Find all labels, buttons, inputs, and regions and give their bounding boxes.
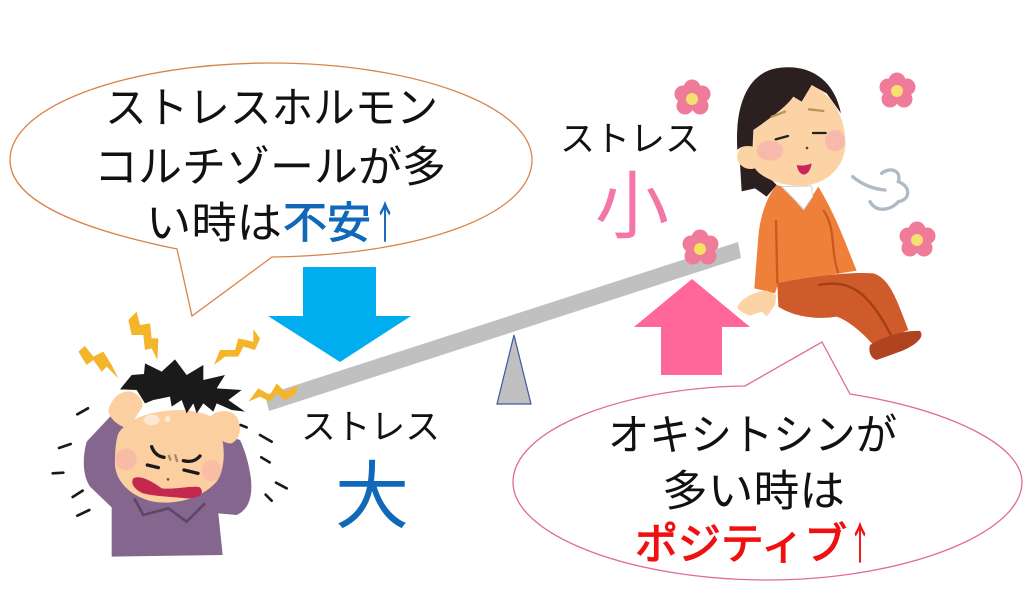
collar xyxy=(782,186,813,209)
seesaw fulcrum xyxy=(497,335,531,404)
illustration: relaxed woman xyxy=(737,67,921,360)
lightning bolts xyxy=(78,312,298,402)
flowers xyxy=(674,72,936,264)
head xyxy=(737,85,845,186)
bubble text: oxytocin: ↑ xyxy=(849,510,871,572)
hands xyxy=(108,391,143,427)
illustration: stressed man xyxy=(53,312,298,557)
seesaw beam xyxy=(265,242,741,411)
bubble text: cortisol: コルチゾールが多 xyxy=(94,144,446,192)
face xyxy=(772,109,823,117)
trousers xyxy=(777,273,908,345)
bubble text: oxytocin xyxy=(608,412,897,572)
label: stress small: 小 xyxy=(595,165,669,248)
face xyxy=(147,447,200,473)
agitation marks xyxy=(53,408,287,516)
speech bubble: oxytocin xyxy=(513,342,1022,580)
label: stress small: ストレス xyxy=(560,120,700,159)
back hair xyxy=(740,163,777,197)
bubble text: oxytocin: ポジティブ xyxy=(635,521,847,569)
hand xyxy=(737,291,777,317)
hair xyxy=(120,359,245,413)
bubble text: cortisol: 不安 xyxy=(283,200,371,248)
collar xyxy=(134,498,205,522)
label: stress large xyxy=(301,408,440,538)
bubble text: oxytocin: 多い時は xyxy=(662,468,845,516)
arrow: blue down xyxy=(268,267,411,362)
shoe xyxy=(869,331,921,360)
breath puff xyxy=(853,170,908,209)
arrow: pink up xyxy=(634,279,750,375)
label: stress large: ストレス xyxy=(301,408,440,447)
head xyxy=(115,410,224,503)
sweater xyxy=(754,185,857,293)
bubble text: oxytocin: オキシトシンが xyxy=(608,412,897,460)
bubble text: cortisol: ↑ xyxy=(374,189,396,251)
label: stress large: 大 xyxy=(335,455,409,538)
bubble text: cortisol: い時は xyxy=(146,200,282,248)
bubble text: cortisol: ストレスホルモン xyxy=(105,85,438,133)
hair xyxy=(737,67,841,150)
sweater xyxy=(84,415,251,557)
bubble text: cortisol xyxy=(94,85,446,251)
label: stress small xyxy=(560,120,700,248)
speech bubble: cortisol xyxy=(10,63,532,316)
